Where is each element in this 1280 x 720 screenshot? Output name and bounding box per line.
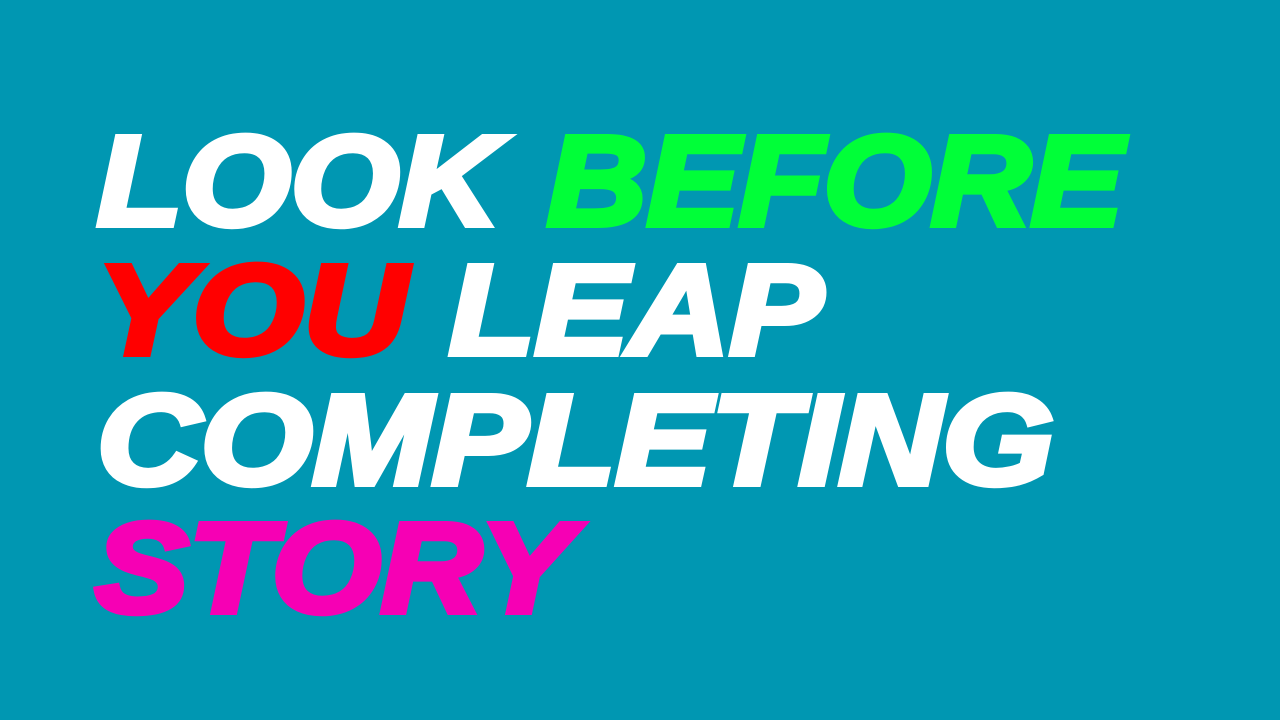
heading line 1: BEFORE — [547, 110, 1127, 253]
heading line 1 — [97, 110, 1127, 253]
heading line 2: YOU — [97, 239, 411, 382]
heading line 2 — [97, 239, 824, 382]
heading line 2: LEAP — [449, 239, 824, 382]
heading line 1: LOOK — [97, 110, 509, 253]
heading line 4: STORY — [95, 497, 584, 640]
heading line 3: COMPLETING — [97, 369, 1054, 512]
